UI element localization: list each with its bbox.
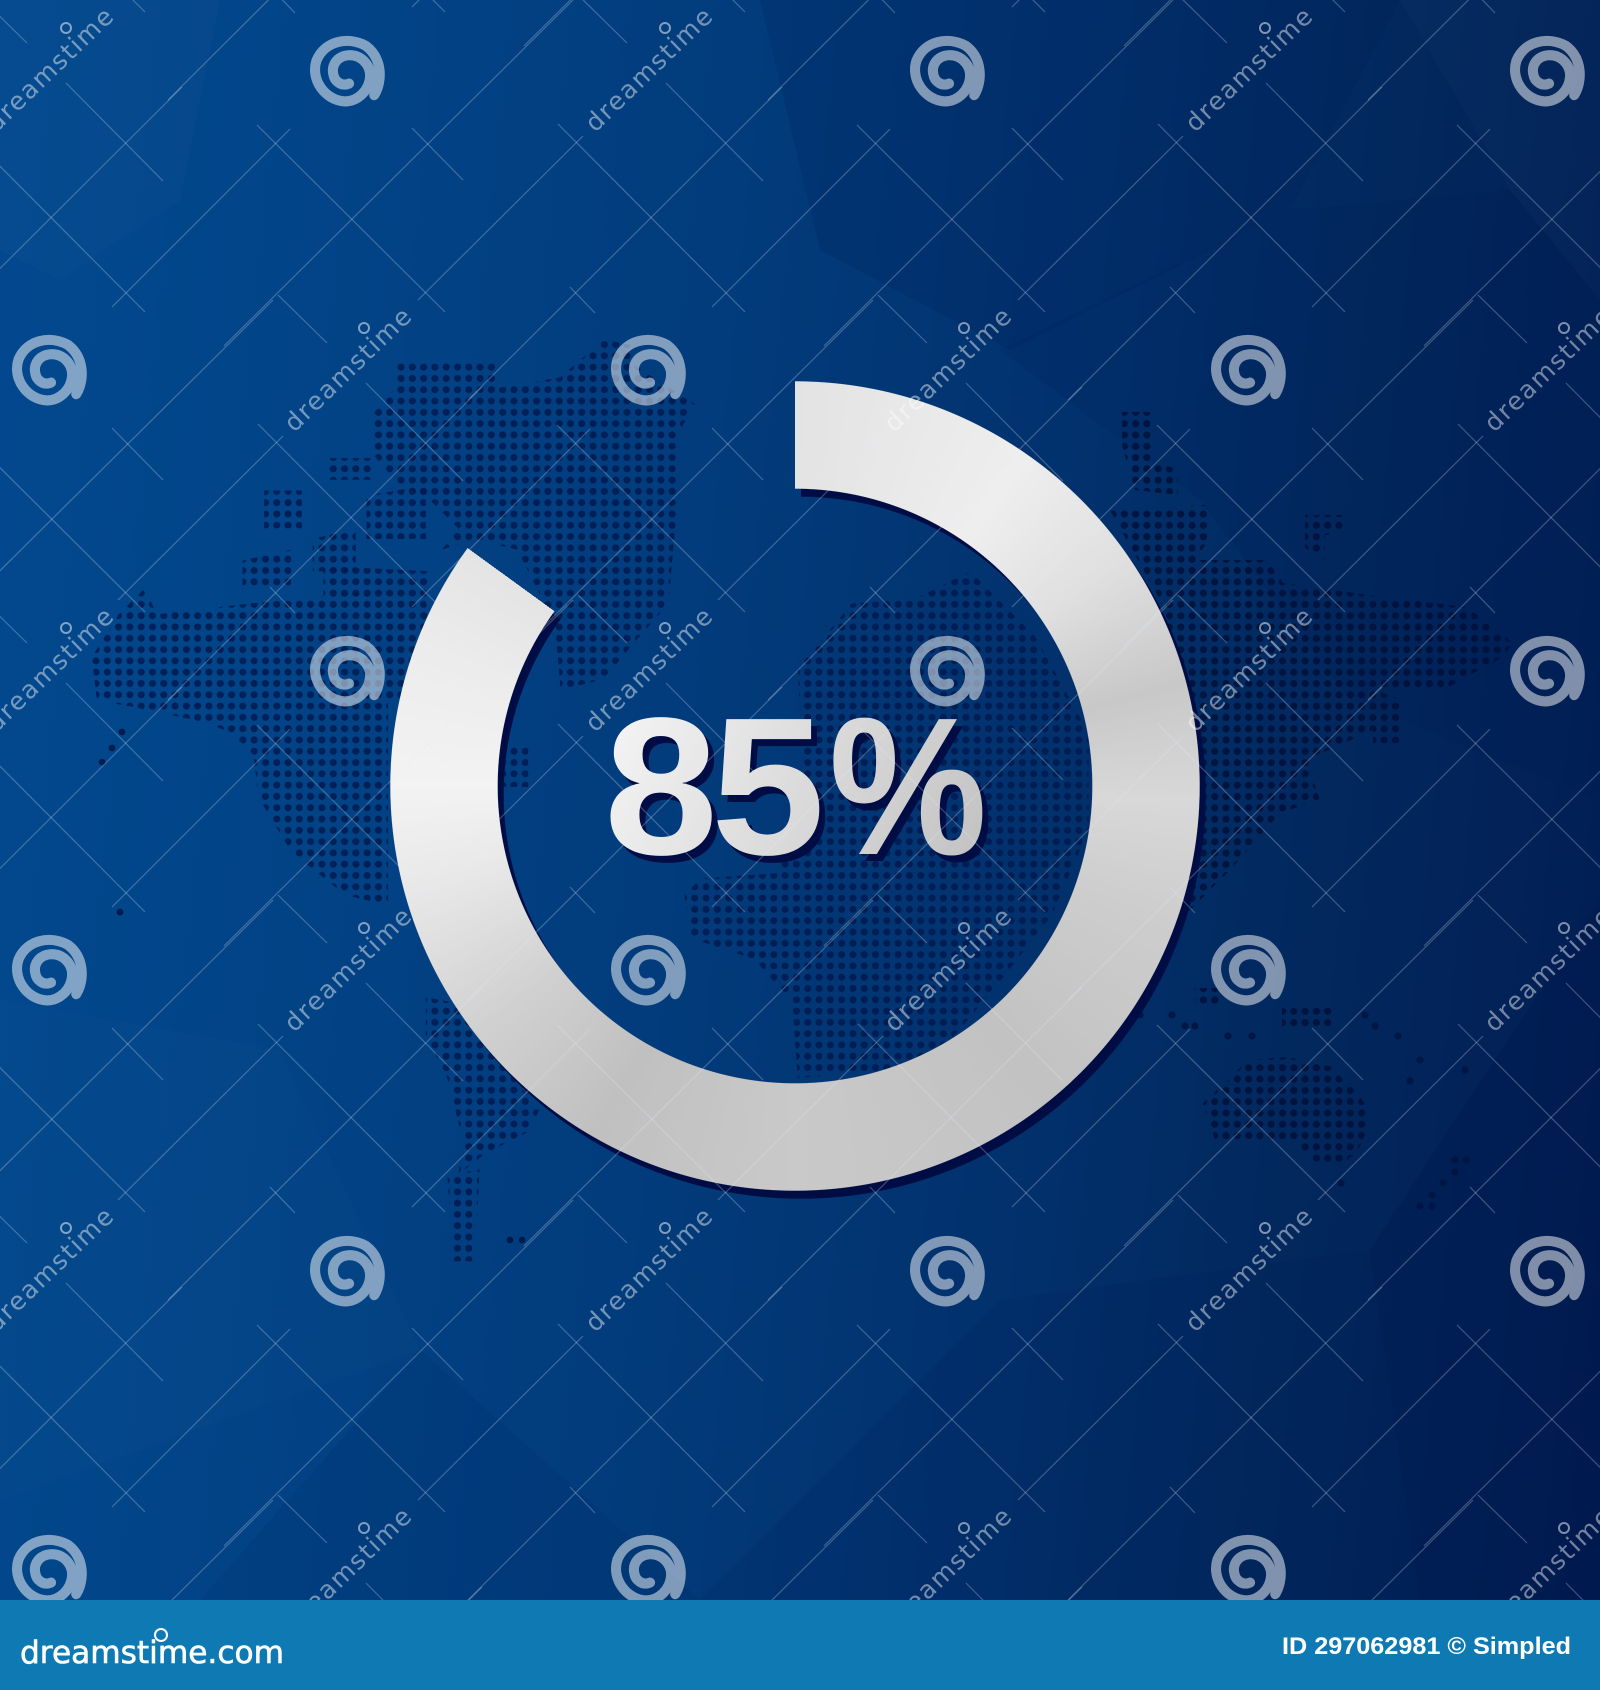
watermark overlay: lattice lines, spirals and dreamstime text: dreamstime	[579, 1202, 718, 1337]
watermark overlay: lattice lines, spirals and dreamstime text: dreamstime	[278, 302, 417, 437]
footer logo text: dreamstime.com	[20, 1635, 284, 1671]
footer bar	[0, 1600, 1600, 1690]
watermark overlay: lattice lines, spirals and dreamstime text: dreamstime	[1179, 2, 1318, 137]
percentage label: 85%: %	[829, 677, 987, 896]
watermark overlay: lattice lines, spirals and dreamstime text: dreamstime	[1179, 602, 1318, 737]
watermark overlay: lattice lines, spirals and dreamstime text: dreamstime	[579, 2, 718, 137]
percentage label: 85%: 5	[711, 677, 825, 896]
watermark overlay: lattice lines, spirals and dreamstime text: dreamstime	[1179, 1202, 1318, 1337]
watermark overlay: lattice lines, spirals and dreamstime text: dreamstime	[278, 902, 417, 1037]
percentage label: 85%: 8	[604, 677, 718, 896]
watermark overlay: lattice lines, spirals and dreamstime text: dreamstime	[878, 902, 1017, 1037]
watermark overlay: lattice lines, spirals and dreamstime text: dreamstime	[579, 602, 718, 737]
progress ring: 85 percent	[390, 381, 1206, 1199]
watermark overlay: lattice lines, spirals and dreamstime text: dreamstime	[878, 302, 1017, 437]
footer image id and credit: ID 297062981 © Simpled	[1282, 1633, 1571, 1660]
footer logo spiral mark	[155, 1629, 167, 1641]
